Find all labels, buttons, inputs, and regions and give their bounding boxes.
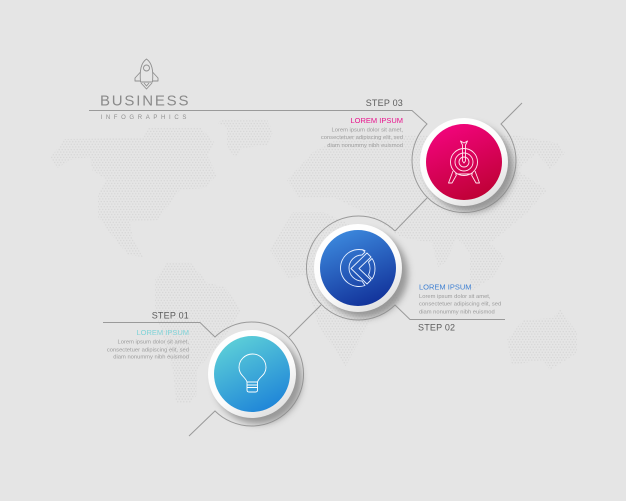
icon: light bulb: [239, 354, 266, 392]
connector lines and rings: [89, 103, 522, 436]
north america: [50, 127, 217, 257]
white rim: [208, 330, 296, 418]
step 1 body: Lorem ipsum dolor sit amet,: [117, 340, 189, 346]
white rim: [314, 224, 402, 312]
south america: [155, 262, 241, 403]
subtitle: INFOGRAPHICS: [100, 115, 190, 121]
text block: step 2: [418, 282, 501, 332]
step 3 ring: [89, 103, 522, 213]
step 1 body: consectetuer adipiscing elit, sed: [107, 347, 189, 353]
step 1 ring: [103, 322, 304, 436]
shadow: [320, 230, 408, 318]
step 1 badge: [208, 330, 302, 424]
white rim: [420, 118, 508, 206]
title: BUSINESS: [100, 92, 190, 110]
step 2 body: diam nonummy nibh euismod: [419, 309, 495, 315]
step 1 label: STEP 01: [152, 310, 189, 320]
text block: step 3: [321, 98, 403, 149]
shadow: [426, 124, 514, 212]
teal disc: [214, 336, 290, 412]
step 3 body: diam nonummy nibh euismod: [327, 143, 403, 149]
logo: business infographics: [100, 59, 190, 121]
africa: [270, 212, 400, 367]
step 3 heading: LOREM IPSUM: [350, 116, 403, 125]
step 2 badge: [314, 224, 408, 318]
step 2 body: Lorem ipsum dolor sit amet,: [419, 294, 491, 300]
connector 2 to 1: [289, 305, 321, 337]
icon: target with arrow: [448, 141, 480, 183]
pink disc: [426, 124, 502, 200]
step 1 heading: LOREM IPSUM: [136, 328, 189, 337]
step 3 body: Lorem ipsum dolor sit amet,: [331, 128, 403, 134]
step 2 body: consectetuer adipiscing elit, sed: [419, 302, 501, 308]
australia: [507, 308, 577, 370]
step 2 label: STEP 02: [418, 322, 455, 332]
blue disc: [320, 230, 396, 306]
step 1 body: diam nonummy nibh euismod: [113, 355, 189, 361]
eurasia: [287, 135, 565, 292]
step 2 ring: [306, 216, 505, 320]
greenland: [218, 119, 273, 157]
icon: pie chart arrows: [341, 250, 375, 286]
step 3 badge: [420, 118, 514, 212]
dotted world map: [50, 119, 577, 403]
text block: step 1: [107, 310, 189, 361]
connector 3 to 2: [395, 198, 427, 231]
step 2 heading: LOREM IPSUM: [419, 282, 472, 292]
step 3 body: consectetuer adipiscing elit, sed: [321, 135, 403, 141]
icon: rocket: [135, 59, 158, 89]
shadow: [214, 336, 302, 424]
step 3 label: STEP 03: [366, 98, 403, 108]
